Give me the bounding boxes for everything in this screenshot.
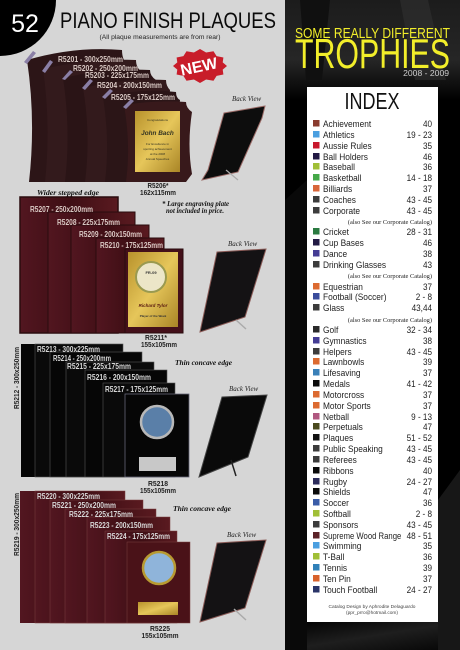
gold plate with emblem (128, 252, 178, 327)
caption: R5218: R5218 (148, 479, 168, 488)
index entries: 40 (423, 465, 432, 476)
note: engraving plate: not included in price. (166, 206, 224, 215)
index entries: Sponsors (323, 519, 359, 530)
index entries: 37 (423, 183, 432, 194)
index entries: 39 (423, 356, 432, 367)
medal (143, 552, 175, 584)
subtitle: (All plaque measurements are from rear) (100, 34, 220, 41)
plaque group: R5207-R5211: R5209 - 200x150mm (79, 230, 142, 239)
plaque group: R5207-R5211: FR-09 (145, 270, 157, 275)
index entries: (also See our Corporate Catalog) (348, 273, 432, 280)
index entries: Football (Soccer) (323, 291, 387, 302)
index entries: Touch Football (323, 584, 377, 595)
plaque group: R5207-R5211: R5210 - 175x125mm (100, 241, 163, 250)
plaque group: R5201-R5206: R5204 - 200x150mm (97, 81, 162, 90)
index entries: Equestrian (323, 281, 363, 292)
index entries: 47 (423, 486, 432, 497)
plaque group: R5220-R5225: R5221 - 250x200mm (52, 501, 116, 510)
back view label 3: Back View (229, 385, 259, 393)
index entries: Softball (323, 508, 351, 519)
index entries: Motor Sports (323, 400, 371, 411)
index entries: 24 - 27 (407, 584, 432, 595)
plaque group: R5201-R5206: R5205 - 175x125mm (111, 93, 175, 102)
index entries: 48 - 51 (407, 530, 432, 541)
plaque group: R5213-R5218: R5215 - 225x175mm (67, 362, 131, 371)
design credit: Catalog Design by Aphrodite Delaguardo (329, 604, 416, 610)
index entries: Cup Bases (323, 237, 364, 248)
index entries: 51 - 52 (407, 432, 432, 443)
index entries: Tennis (323, 562, 348, 573)
index entries: 28 - 31 (407, 226, 432, 237)
index entries: 36 (423, 161, 432, 172)
gold plate (135, 111, 180, 172)
index entries: 46 (423, 237, 432, 248)
index entries: 43 - 45 (407, 519, 432, 530)
index entries: 38 (423, 335, 432, 346)
index entries: Athletics (323, 129, 355, 140)
caption: R5211: R5211* (145, 333, 167, 342)
gold plate (138, 602, 178, 615)
index entries: Billiards (323, 183, 353, 194)
index entries: Shields (323, 486, 351, 497)
design credit (329, 604, 416, 616)
badge: new (173, 49, 227, 83)
index entries: 43 - 45 (407, 205, 432, 216)
index entries: 36 (423, 551, 432, 562)
index entries: 43,44 (412, 302, 432, 313)
caption: R5206 (140, 181, 176, 197)
caption: R5225 (142, 624, 179, 640)
index entries: 40 (423, 118, 432, 129)
back view label 2: Back View (228, 240, 258, 248)
index entries: 19 - 23 (407, 129, 432, 140)
caption: R5218: 155x105mm (140, 486, 176, 495)
back view plaque 1 (202, 106, 265, 180)
plaque group: R5201-R5206: Annual Speeches (146, 157, 170, 161)
page number badge (0, 0, 56, 56)
index entries: Ribbons (323, 465, 354, 476)
index entries: Soccer (323, 497, 349, 508)
index entries: Motorcross (323, 389, 365, 400)
plaque group: R5213-R5218: R5213 - 300x225mm (37, 345, 100, 354)
index entries: Cricket (323, 226, 349, 237)
caption: R5218 (140, 479, 176, 495)
index entries: 37 (423, 367, 432, 378)
index entries: Dance (323, 248, 347, 259)
plaque group: R5201-R5206: R5203 - 225x175mm (85, 71, 149, 80)
note: engraving plate: * Large engraving plate (162, 199, 230, 208)
index entries: Supreme Wood Range (323, 530, 401, 541)
index entries: 35 (423, 540, 432, 551)
title: PIANO FINISH PLAQUES (60, 8, 276, 33)
index entries: Plaques (323, 432, 354, 443)
index entries: 46 (423, 151, 432, 162)
caption: R5211: 155x105mm (141, 340, 177, 349)
note: thin concave edge: Thin concave edge (173, 504, 232, 513)
index entries: Helpers (323, 346, 352, 357)
plaque group: R5207-R5211: R5207 - 250x200mm (30, 205, 93, 214)
index entries: Glass (323, 302, 345, 313)
index entries: Public Speaking (323, 443, 383, 454)
panel: dark fabric sidebar (285, 0, 460, 650)
plaque group: R5201-R5206: at the 2008 (150, 152, 165, 156)
plaque group: R5213-R5218: R5216 - 200x150mm (87, 373, 151, 382)
index entries: 37 (423, 573, 432, 584)
index entries: Perpetuals (323, 421, 363, 432)
back view plaque 4 (200, 540, 266, 622)
label: R5212 vertical: R5212 - 300x250mm (12, 347, 21, 409)
index entries: Ten Pin (323, 573, 351, 584)
index entries: 43 - 45 (407, 443, 432, 454)
index entries: Gymnastics (323, 335, 367, 346)
plaque group: R5220-R5225: R5220 - 300x225mm (37, 492, 100, 501)
page background (0, 0, 285, 650)
caption: R5206: 162x115mm (140, 188, 176, 197)
index entries: Baseball (323, 161, 355, 172)
plaque group: R5201-R5206: R5202 - 250x200mm (73, 64, 138, 73)
index entries: Ball Holders (323, 151, 368, 162)
note: engraving plate (162, 199, 230, 215)
plaque group: R5201-R5206: John Bach (141, 130, 174, 137)
index entries: 37 (423, 389, 432, 400)
index entries: Golf (323, 324, 339, 335)
design credit: (ppr_prro@hotmail.com) (346, 610, 398, 616)
silver plate (139, 457, 176, 471)
back view plaque 2 (200, 249, 266, 332)
index entries: 43 - 45 (407, 454, 432, 465)
plaque group: R5201-R5206: R5201 - 300x250mm (58, 55, 123, 64)
index entries: T-Ball (323, 551, 344, 562)
index entries (313, 118, 432, 595)
label: R5219 vertical: R5219 - 300x250mm (12, 493, 21, 556)
index entries: 37 (423, 400, 432, 411)
plaque group: R5220-R5225 (20, 491, 190, 623)
index entries: 47 (423, 421, 432, 432)
panel: index (307, 87, 438, 622)
index entries: Netball (323, 411, 349, 422)
index entries: 43 (423, 259, 432, 270)
note: thin concave edge: Thin concave edge (175, 358, 233, 367)
index entries: 43 - 45 (407, 194, 432, 205)
index entries: 24 - 27 (407, 476, 432, 487)
caption: R5225: R5225 (150, 624, 170, 633)
index entries: Achievement (323, 118, 372, 129)
plaque group: R5207-R5211: Richard Tylor (139, 303, 168, 308)
back view plaque 3 (199, 395, 267, 477)
index entries: Coaches (323, 194, 356, 205)
back view label 4: Back View (227, 531, 257, 539)
plaque group: R5201-R5206: sporting achievement (143, 147, 172, 151)
index entries: (also See our Corporate Catalog) (348, 219, 432, 226)
medal (141, 406, 173, 438)
plaque group: R5220-R5225: R5224 - 175x125mm (107, 532, 170, 541)
plaque group: R5220-R5225: R5223 - 200x150mm (90, 521, 153, 530)
index entries: Swimming (323, 540, 361, 551)
index entries: 38 (423, 248, 432, 259)
index entries: (also See our Corporate Catalog) (348, 317, 432, 324)
plaque group: R5220-R5225: R5222 - 225x175mm (69, 510, 133, 519)
page number badge: 52 (11, 10, 39, 38)
plaque group: R5207-R5211: Player of the Week (140, 314, 167, 318)
index entries: 43 - 45 (407, 346, 432, 357)
plaque group: R5201-R5206: Congratulations (147, 118, 169, 122)
text: years: 2008 - 2009 (403, 68, 449, 78)
caption: R5225: 155x105mm (142, 631, 179, 640)
index entries: 36 (423, 497, 432, 508)
plaque group: R5213-R5218 (21, 344, 189, 477)
index entries: Basketball (323, 172, 361, 183)
accents: plaque hangers (24, 51, 134, 109)
plaque group: R5201-R5206 (24, 49, 192, 182)
index entries: 39 (423, 562, 432, 573)
caption: R5206: R5206* (148, 181, 169, 190)
index heading: INDEX (344, 88, 400, 114)
plaque group: R5207-R5211: R5208 - 225x175mm (57, 218, 120, 227)
plaque group: R5213-R5218: R5214 - 250x200mm (53, 354, 111, 363)
badge: new: NEW (179, 55, 220, 80)
index entries: Medals (323, 378, 350, 389)
note: wider stepped edge: Wider stepped edge (37, 188, 100, 197)
index entries: 2 - 8 (416, 508, 432, 519)
plaque group: R5213-R5218: R5217 - 175x125mm (105, 385, 168, 394)
index entries: Referees (323, 454, 357, 465)
index entries: 41 - 42 (407, 378, 432, 389)
index entries: Corporate (323, 205, 360, 216)
plaque group: R5207-R5211 (20, 197, 183, 333)
index entries: 9 - 13 (411, 411, 432, 422)
index entries: 35 (423, 140, 432, 151)
index entries: Lawnbowls (323, 356, 365, 367)
index entries: 37 (423, 281, 432, 292)
plaque group: R5201-R5206: For Excellence in (146, 142, 169, 146)
back view label 1: Back View (232, 95, 262, 103)
index entries: Rugby (323, 476, 348, 487)
caption: R5211 (141, 333, 177, 349)
index entries: 2 - 8 (416, 291, 432, 302)
index entries: Lifesaving (323, 367, 361, 378)
index entries: 32 - 34 (407, 324, 432, 335)
index entries: Drinking Glasses (323, 259, 387, 270)
index entries: 14 - 18 (407, 172, 432, 183)
index entries: Aussie Rules (323, 140, 372, 151)
